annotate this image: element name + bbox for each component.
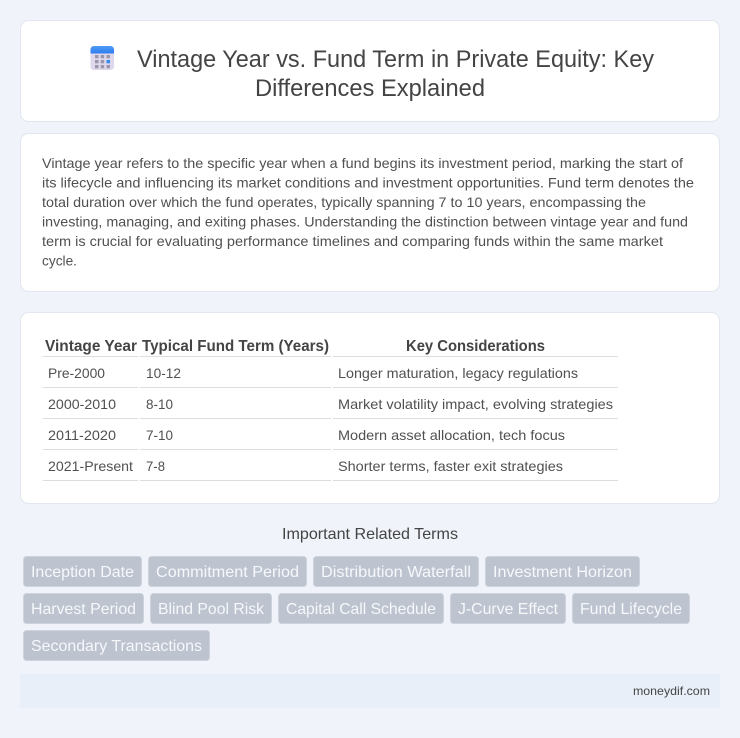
table row: 2000-2010: Market volatility impact, evolving strategies (338, 396, 613, 412)
table row: Pre-2000: Longer maturation, legacy regulations (338, 365, 578, 381)
table row: 2021-Present (43, 458, 618, 481)
table header: Typical Fund Term (Years) (142, 338, 329, 355)
tag: J-Curve Effect: J-Curve Effect (458, 601, 559, 618)
text block: description paragraph (42, 155, 694, 268)
text block: description paragraph: its lifecycle and influencing its market conditions and investment opportunities. Fund term denotes the (42, 174, 694, 190)
tag: Secondary Transactions: Secondary Transactions (31, 638, 202, 655)
table row: Pre-2000: Pre-2000 (48, 365, 105, 381)
tag: Distribution Waterfall: Distribution Waterfall (321, 564, 471, 581)
tag: Commitment Period: Commitment Period (156, 564, 299, 581)
table row: Pre-2000: 10-12 (146, 365, 181, 381)
tag: Fund Lifecycle: Fund Lifecycle (580, 601, 682, 618)
panel: description (20, 134, 720, 292)
table row: 2011-2020: 7-10 (146, 427, 173, 443)
text block: description paragraph: cycle. (42, 252, 77, 268)
tag: Harvest Period: Harvest Period (31, 601, 136, 618)
tag: Investment Horizon (486, 556, 640, 586)
footer (20, 674, 720, 708)
table header: Vintage Year (45, 338, 137, 355)
tag group: related terms (24, 556, 690, 660)
table row: 2000-2010: 8-10 (146, 396, 173, 412)
table row: 2021-Present: 2021-Present (48, 458, 133, 474)
table row: 2011-2020: Modern asset allocation, tech focus (338, 427, 565, 443)
title: Vintage Year vs. Fund Term in Private Equity: Key (137, 46, 654, 73)
tag: Blind Pool Risk: Blind Pool Risk (158, 601, 265, 618)
tag: Capital Call Schedule: Capital Call Schedule (286, 601, 436, 618)
tag: Inception Date: Inception Date (31, 564, 134, 581)
table row: 2021-Present: 7-8 (146, 458, 165, 474)
footer: moneydif.com (633, 684, 710, 698)
text block: description paragraph: investing, managing, and exiting phases. Understanding the distinction between vintage year and fund (42, 214, 688, 230)
tag: Fund Lifecycle (572, 594, 690, 624)
tag: Harvest Period (24, 594, 144, 624)
table header: Key Considerations (406, 338, 545, 355)
tag: J-Curve Effect (450, 594, 566, 624)
title: Differences Explained (255, 75, 485, 102)
panel: comparison table (20, 312, 720, 504)
table row: 2011-2020: 2011-2020 (48, 427, 116, 443)
tag: Investment Horizon: Investment Horizon (493, 564, 632, 581)
panel: title header (20, 20, 720, 122)
tag: Capital Call Schedule (278, 594, 444, 624)
tag: Commitment Period (148, 556, 306, 586)
table header (43, 338, 618, 357)
tag: Secondary Transactions (24, 630, 210, 660)
heading: related terms: Important Related Terms (282, 526, 458, 543)
title (137, 46, 654, 102)
table row: 2000-2010: 2000-2010 (48, 396, 116, 412)
tag: Inception Date (24, 556, 142, 586)
table row: Pre-2000 (43, 365, 618, 388)
tag: Blind Pool Risk (150, 594, 272, 624)
tag: Distribution Waterfall (314, 556, 478, 586)
text block: description paragraph: term is crucial for evaluating performance timelines and comparing funds within the same market (42, 233, 663, 249)
text block: description paragraph: total duration over which the fund operates, typically spanning 7 to 10 years, encompassing the (42, 194, 646, 210)
table row: 2011-2020 (43, 427, 618, 450)
table row: 2021-Present: Shorter terms, faster exit strategies (338, 458, 563, 474)
table row: 2000-2010 (43, 396, 618, 419)
text block: description paragraph: Vintage year refers to the specific year when a fund begins its investment period, marking the start of (42, 155, 683, 171)
icon: calendar (90, 46, 114, 70)
